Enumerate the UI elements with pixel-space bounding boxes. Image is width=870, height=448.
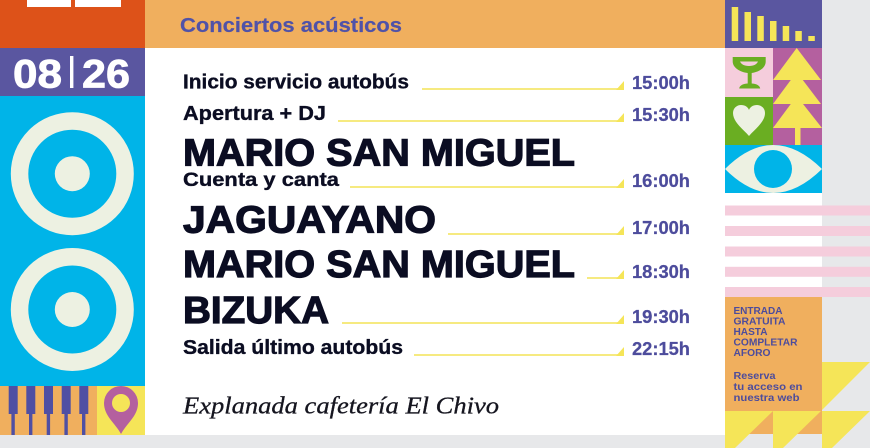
row: jaguayano: 17:00h: [632, 218, 690, 238]
row: inicio servicio autobus: [183, 72, 690, 94]
row: jaguayano: [183, 200, 690, 242]
row: mario san miguel: MARIO SAN MIGUEL: [183, 244, 575, 286]
yellow triangles: [725, 362, 870, 448]
panel: free entry info: [725, 297, 822, 434]
panel: blue circles: [0, 96, 145, 386]
row: bizuka: BIZUKA: [183, 290, 329, 332]
row: bizuka: [183, 290, 690, 332]
panel: free entry info: nuestra web: [734, 392, 800, 404]
pink stripes: [725, 206, 870, 297]
row: bizuka: 19:30h: [632, 307, 690, 327]
panel: free entry info: tu acceso en: [734, 381, 802, 393]
row: apertura + DJ: Apertura + DJ: [183, 103, 326, 125]
icon: heart: [725, 97, 773, 145]
row: inicio servicio autobus: Inicio servicio autobús: [183, 72, 409, 94]
row: mario san miguel, cuenta y canta: [183, 132, 690, 191]
row: salida ultimo autobus: 22:15h: [632, 339, 690, 359]
panel: top heading band: [145, 0, 725, 48]
icon: tree: [773, 48, 822, 145]
row: mario san miguel: 18:30h: [632, 262, 690, 282]
icon: cocktail glass: [725, 48, 773, 97]
panel: free entry info: ENTRADA: [734, 305, 783, 317]
panel: top left orange block: [0, 0, 145, 48]
panel: date: 26: [82, 52, 130, 96]
icon: piano keys: [0, 386, 97, 435]
panel: date: 08: [13, 52, 62, 96]
row: salida ultimo autobus: [183, 337, 690, 359]
row: apertura + DJ: 15:30h: [632, 105, 690, 125]
panel: free entry info: AFORO: [734, 347, 770, 359]
row: inicio servicio autobus: 15:00h: [632, 73, 690, 93]
row: mario san miguel, cuenta y canta: Cuenta y canta: [183, 170, 339, 191]
panel: free entry info: HASTA: [734, 326, 768, 338]
row: salida ultimo autobus: Salida último autobús: [183, 337, 403, 359]
panel: free entry info: COMPLETAR: [734, 336, 798, 348]
row: jaguayano: JAGUAYANO: [183, 200, 436, 242]
row: mario san miguel, cuenta y canta: MARIO SAN MIGUEL: [183, 132, 575, 174]
icon: location pin: [97, 386, 145, 435]
row: apertura + DJ: [183, 103, 690, 125]
heading: conciertos acusticos: Conciertos acústicos: [180, 14, 402, 37]
panel: free entry info: GRATUITA: [734, 316, 786, 328]
panel: free entry info: Reserva: [734, 370, 776, 382]
row: mario san miguel, cuenta y canta: 16:00h: [632, 171, 690, 191]
panel: date: [0, 48, 145, 96]
venue text: Explanada cafetería El Chivo: [182, 394, 499, 420]
icon: eye: [725, 145, 822, 193]
icon: bar chart: [725, 0, 822, 48]
